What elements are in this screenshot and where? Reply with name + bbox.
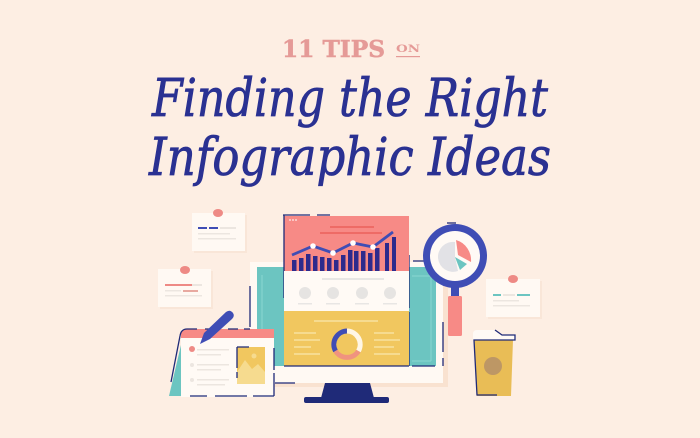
title [148, 69, 551, 188]
icon: pen [200, 311, 234, 344]
panel: line and bar chart [283, 215, 409, 298]
monitor [250, 255, 448, 403]
note: right [486, 275, 542, 319]
monitor stand [304, 383, 389, 403]
icon: magnifying glass with pie chart [423, 223, 487, 336]
title: Finding the Right [151, 69, 548, 129]
calendar card [169, 311, 274, 397]
kicker: 11 tips on: ON [396, 44, 420, 55]
note: middle left [158, 266, 213, 309]
image thumbnail [237, 347, 265, 384]
note: top left [192, 209, 247, 253]
panel: stat circles [284, 271, 409, 311]
icon: coffee cup [473, 330, 516, 396]
kicker: 11 tips on: 11 TIPS [282, 36, 385, 63]
illustration: data dashboard [158, 209, 542, 403]
title: Infographic Ideas [148, 128, 551, 188]
dashboard page [283, 215, 409, 366]
panel: donut chart [284, 311, 409, 366]
